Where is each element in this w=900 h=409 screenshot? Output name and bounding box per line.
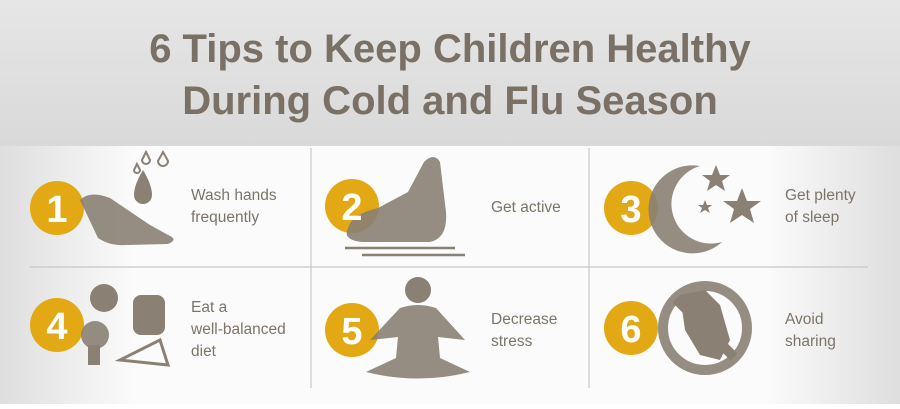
tip 4: diet: 4 <box>46 306 68 348</box>
tip 5: decrease stress <box>325 277 557 378</box>
tip 1: wash hands: frequently <box>191 209 259 226</box>
title <box>149 27 752 123</box>
tip 2: get active: 2 <box>341 187 363 229</box>
tip 5: decrease stress: 5 <box>341 311 363 353</box>
tip 6: avoid sharing: sharing <box>785 333 836 350</box>
tip 3: sleep: Get plenty <box>785 187 856 204</box>
tip 4: diet: Eat a <box>191 299 228 316</box>
tip 3: sleep <box>604 165 856 253</box>
tip 4: diet: well-balanced <box>190 321 286 338</box>
tip 5: decrease stress: stress <box>491 333 533 350</box>
tip 3: sleep: of sleep <box>785 209 839 226</box>
tip 1: wash hands: Wash hands <box>191 187 277 204</box>
tip 2: get active: Get active <box>491 199 561 216</box>
tip 6: avoid sharing: Avoid <box>785 311 824 328</box>
tip 1: wash hands <box>30 152 277 245</box>
title: 6 Tips to Keep Children Healthy <box>149 27 752 71</box>
tip 6: avoid sharing <box>604 286 836 370</box>
tip 6: avoid sharing: 6 <box>620 309 642 351</box>
tip 3: sleep: 3 <box>620 189 642 231</box>
title: During Cold and Flu Season <box>182 79 718 123</box>
tip 2: get active <box>325 157 561 255</box>
tip 4: diet: diet <box>191 343 217 360</box>
tip 4: diet <box>30 284 286 365</box>
tip 1: wash hands: 1 <box>46 189 68 231</box>
tip 5: decrease stress: Decrease <box>491 311 557 328</box>
